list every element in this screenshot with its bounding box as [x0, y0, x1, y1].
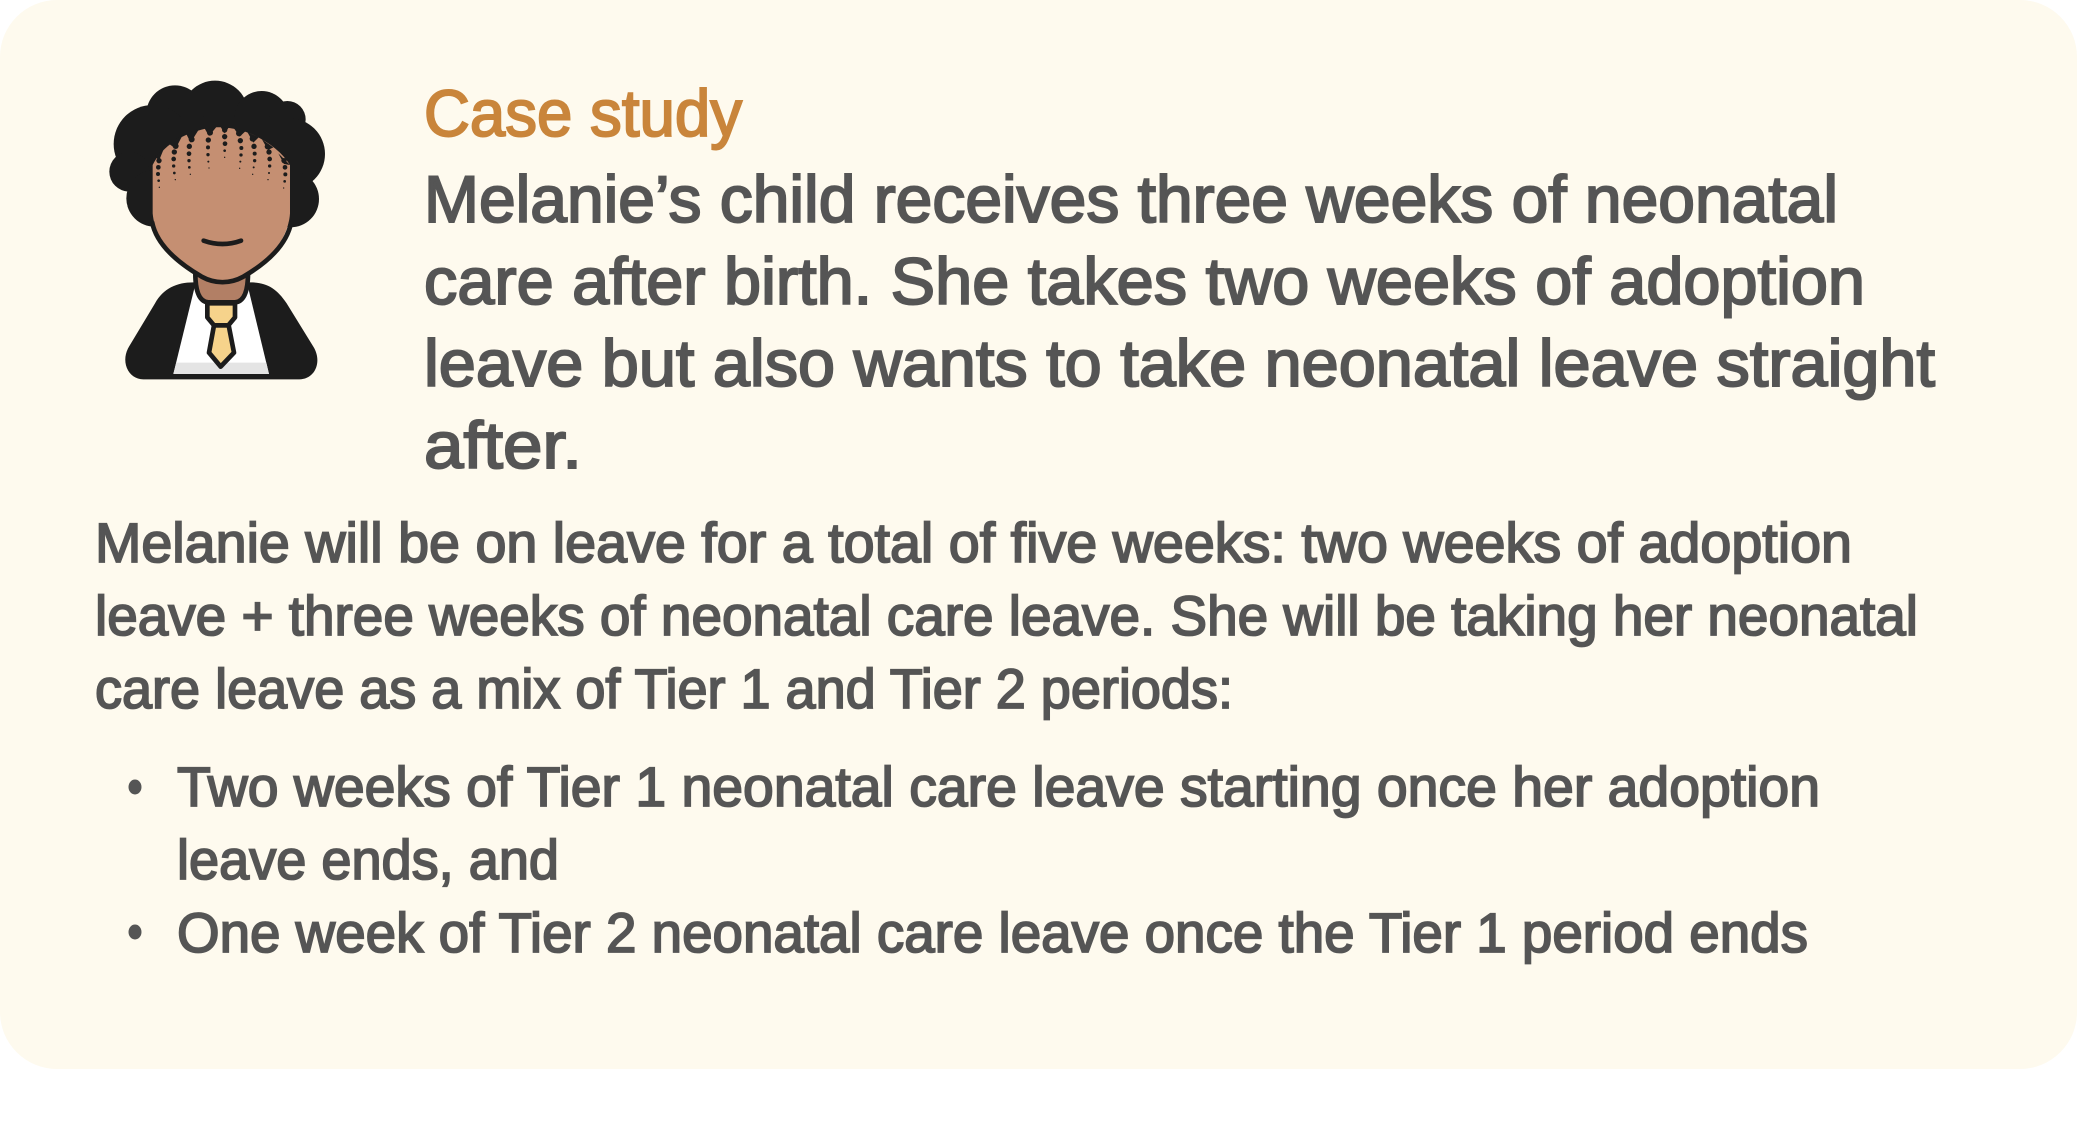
- face: [153, 127, 290, 282]
- text block: explanation: [95, 511, 1918, 720]
- list item: tier 1 period: Two weeks of Tier 1 neonatal care leave starting once her adoption: [177, 755, 1820, 818]
- mouth: [204, 241, 241, 244]
- bullet: tier 2: [128, 924, 142, 940]
- face outline: [152, 222, 291, 282]
- text block: scenario: after.: [424, 408, 582, 482]
- text block: scenario: leave but also wants to take neonatal leave straight: [424, 326, 1935, 400]
- list item: tier 1 period: leave ends, and: [177, 828, 559, 891]
- neck: [195, 273, 248, 302]
- tie: [207, 303, 235, 367]
- list: leave periods: [128, 755, 1820, 964]
- text block: explanation: leave + three weeks of neonatal care leave. She will be taking her neonatal: [95, 584, 1918, 647]
- hair: [109, 81, 325, 227]
- text block: scenario: [424, 162, 1935, 482]
- heading: case study: Case study: [424, 76, 742, 150]
- list item: tier 2 period: One week of Tier 2 neonatal care leave once the Tier 1 period ends: [177, 901, 1808, 964]
- text block: explanation: Melanie will be on leave for a total of five weeks: two weeks of adoption: [95, 511, 1852, 574]
- bullet: tier 1: [128, 780, 142, 794]
- text block: scenario: care after birth. She takes two weeks of adoption: [424, 244, 1865, 318]
- text block: explanation: care leave as a mix of Tier 1 and Tier 2 periods:: [95, 657, 1233, 720]
- braids: [156, 127, 287, 189]
- shirt: [173, 288, 269, 374]
- text block: scenario: Melanie’s child receives three weeks of neonatal: [424, 162, 1838, 236]
- icon: Melanie avatar: [109, 81, 325, 379]
- list item: tier 1 period: [177, 755, 1820, 891]
- hair fringe parts: [155, 126, 290, 165]
- jacket: [125, 282, 317, 379]
